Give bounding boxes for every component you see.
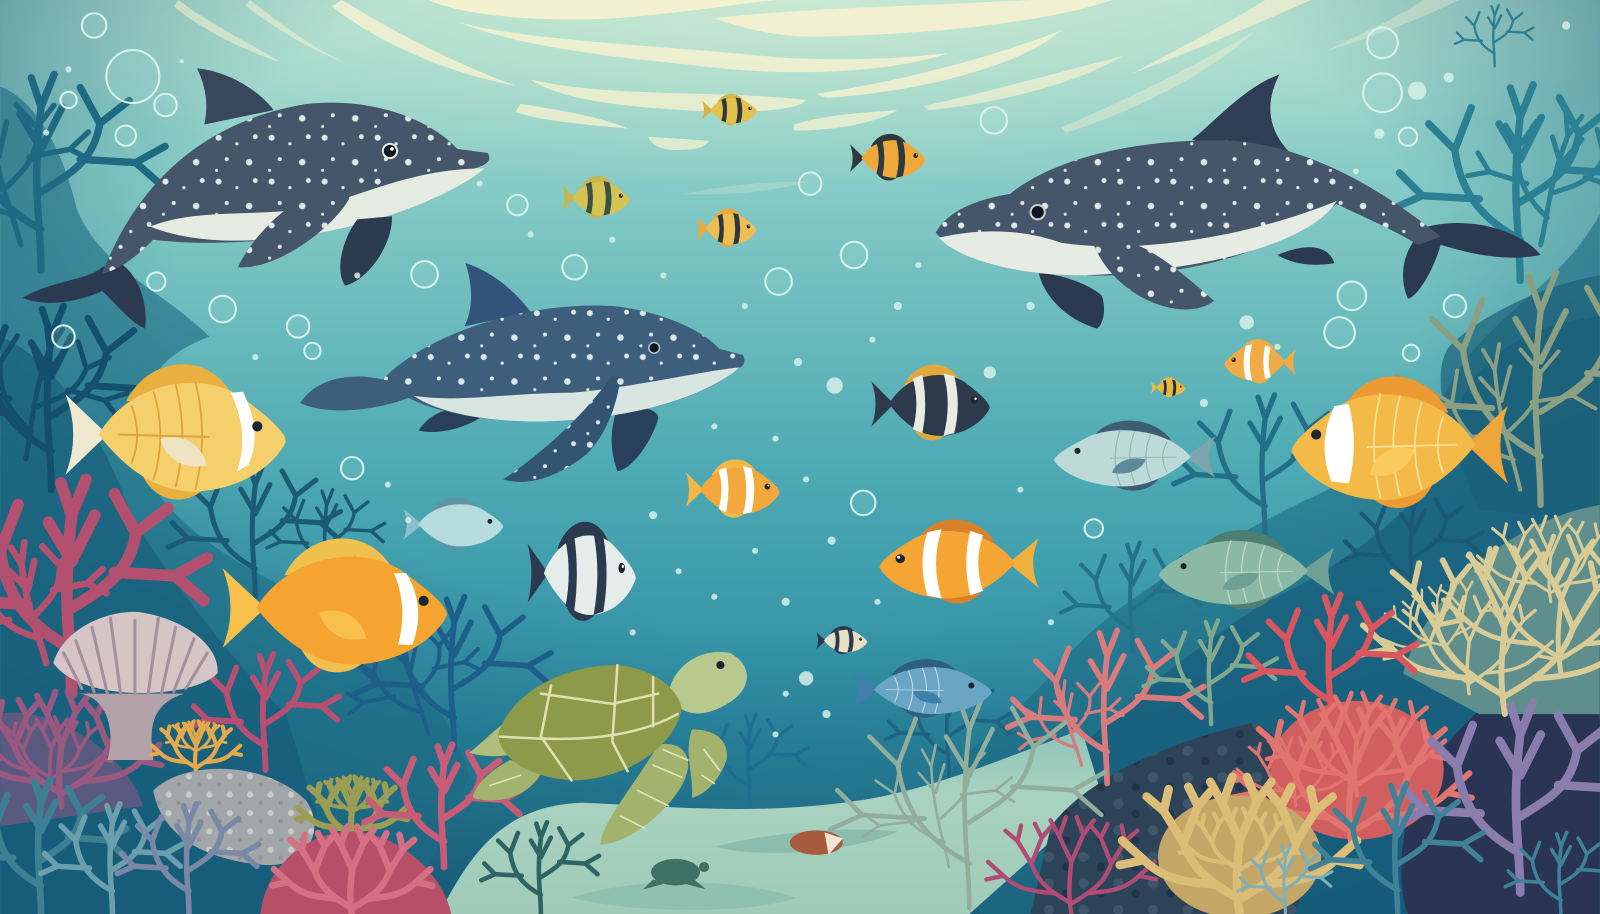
belly bbox=[413, 367, 740, 422]
flipper bbox=[503, 375, 620, 482]
bubbles: dots bbox=[43, 21, 1570, 738]
fish: top small yellow bbox=[702, 94, 757, 125]
rear flippers bbox=[473, 760, 543, 800]
fish: top orange black bbox=[850, 134, 925, 181]
lower fin bbox=[340, 216, 392, 286]
belly bbox=[150, 168, 485, 241]
sea floor bbox=[439, 729, 1102, 914]
coral: big red left bbox=[0, 479, 207, 694]
coral: lilac branching bbox=[1397, 703, 1600, 893]
fish: tiny yellow-black bbox=[1151, 377, 1186, 397]
coral: cream fan right bbox=[1360, 505, 1600, 714]
coral: sage branching bbox=[1143, 620, 1277, 724]
coral: salmon branching bbox=[1006, 630, 1204, 783]
coral: dark green floor bbox=[481, 822, 599, 914]
fish: clown upper right bbox=[1224, 339, 1296, 383]
small turtle on floor bbox=[643, 859, 709, 890]
whale: center bbox=[300, 263, 744, 482]
eye bbox=[1030, 204, 1046, 220]
shell plates bbox=[500, 665, 678, 780]
coral: golden dense bottom bbox=[1120, 777, 1360, 914]
rock: dark right bbox=[1031, 275, 1600, 914]
fish: big orange bbox=[223, 538, 447, 672]
coral: dense salmon bbox=[1232, 693, 1472, 847]
whale: top right bbox=[936, 74, 1541, 328]
fish: clown small center bbox=[686, 459, 780, 518]
coral: tan branching right bbox=[1389, 272, 1600, 509]
floor shading and pebbles bbox=[572, 829, 898, 910]
coral: pink middle left bbox=[190, 654, 339, 770]
background corals, right bbox=[885, 5, 1600, 775]
coral: pink near turtle bbox=[364, 745, 522, 867]
fish: big gold left bbox=[66, 364, 286, 500]
flipper scale lines bbox=[490, 750, 719, 828]
coral: red branching bbox=[1244, 595, 1417, 729]
fish: angel bbox=[528, 522, 636, 621]
bubbles: rings bbox=[52, 13, 1466, 538]
fish: yellow green bbox=[562, 176, 630, 218]
coral: purple lower left bbox=[0, 692, 161, 826]
whale: top left bbox=[23, 68, 489, 328]
flipper bbox=[238, 182, 349, 267]
coral: teal bottom right bbox=[1238, 783, 1600, 914]
fish: small banded lower bbox=[816, 626, 867, 654]
belly bbox=[939, 201, 1337, 275]
coral: magenta bottom bbox=[986, 817, 1156, 914]
head bbox=[668, 652, 747, 713]
eye bbox=[382, 143, 398, 159]
fish: silver right bbox=[1054, 421, 1215, 491]
small crab shell on floor bbox=[790, 830, 843, 855]
coral: pink dome bottom bbox=[260, 827, 451, 914]
fish: yellow banded bbox=[697, 209, 756, 247]
shell bbox=[498, 665, 682, 780]
sunlight streaks on surface bbox=[174, 0, 1459, 194]
coral: small yellow bbox=[151, 721, 241, 773]
fish: silver left bbox=[403, 497, 503, 550]
background corals, left bbox=[0, 74, 808, 806]
eye bbox=[648, 342, 660, 354]
fish: clown large center right bbox=[880, 519, 1039, 603]
rock: grey left bbox=[153, 769, 314, 865]
fish: green right bbox=[1159, 530, 1335, 609]
fish: blue lower bbox=[853, 659, 992, 718]
turtle bbox=[469, 652, 747, 845]
fish: black white banded bbox=[871, 365, 990, 440]
coral: mustard bbox=[297, 776, 407, 842]
fish: big gold right bbox=[1292, 376, 1508, 508]
coral: pale bush on floor bbox=[830, 694, 1105, 908]
front flipper bbox=[600, 744, 688, 845]
anemone bbox=[53, 612, 218, 760]
flipper bbox=[1092, 238, 1214, 309]
coral: teal bottom left bbox=[0, 779, 259, 914]
